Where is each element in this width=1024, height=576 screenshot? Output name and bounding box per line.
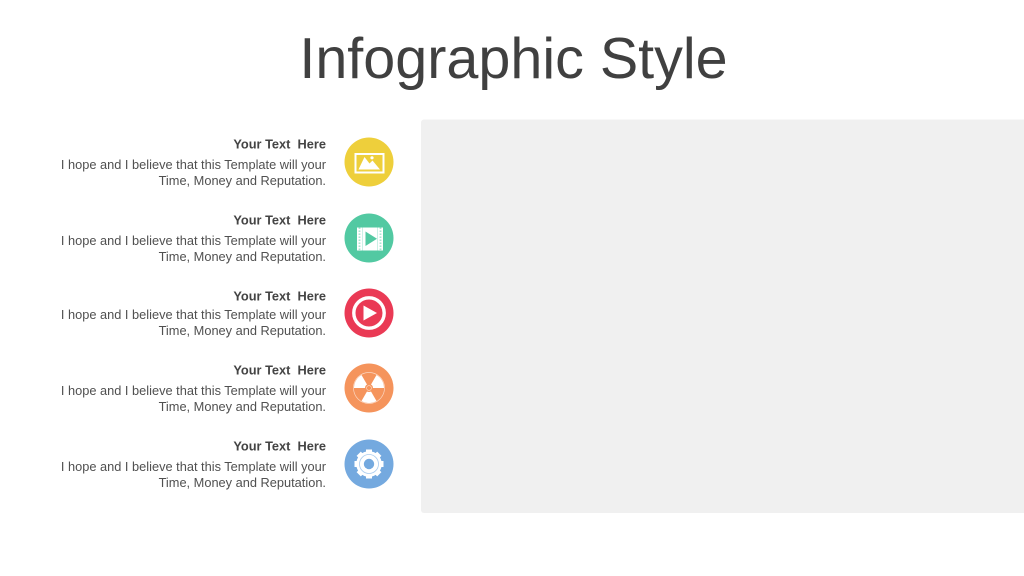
item 5 text: I hope and I believe that this Template will your [61,459,327,474]
item 4 text: Time, Money and Reputation. [159,399,326,414]
item 1 text: Time, Money and Reputation. [159,173,326,188]
item 1 text [61,136,327,188]
icon: play button [344,288,394,338]
icon: gear [344,440,394,488]
item 2 text: I hope and I believe that this Template will your [61,233,327,248]
icon: film play [344,214,394,262]
icon: image [344,138,394,186]
item 5 text [61,438,327,490]
item 2 text [61,212,327,264]
item 4 text: I hope and I believe that this Template will your [61,383,327,398]
item 4 text [61,362,327,414]
panel: grey placeholder [421,120,1024,513]
item 1 text: I hope and I believe that this Template will your [61,157,327,172]
icon: radiation [344,364,394,412]
item 5 text: Time, Money and Reputation. [159,475,326,490]
item 5 text: Your Text Here [233,438,326,454]
item 2 text: Your Text Here [233,212,326,228]
item 1 text: Your Text Here [233,136,326,152]
item 4 text: Your Text Here [233,362,326,378]
item 3 text: Your Text Here [233,288,326,304]
item 3 text [61,288,327,338]
title: Infographic Style [299,27,728,91]
item 3 text: Time, Money and Reputation. [159,323,326,338]
item 2 text: Time, Money and Reputation. [159,249,326,264]
item 3 text: I hope and I believe that this Template will your [61,307,327,322]
